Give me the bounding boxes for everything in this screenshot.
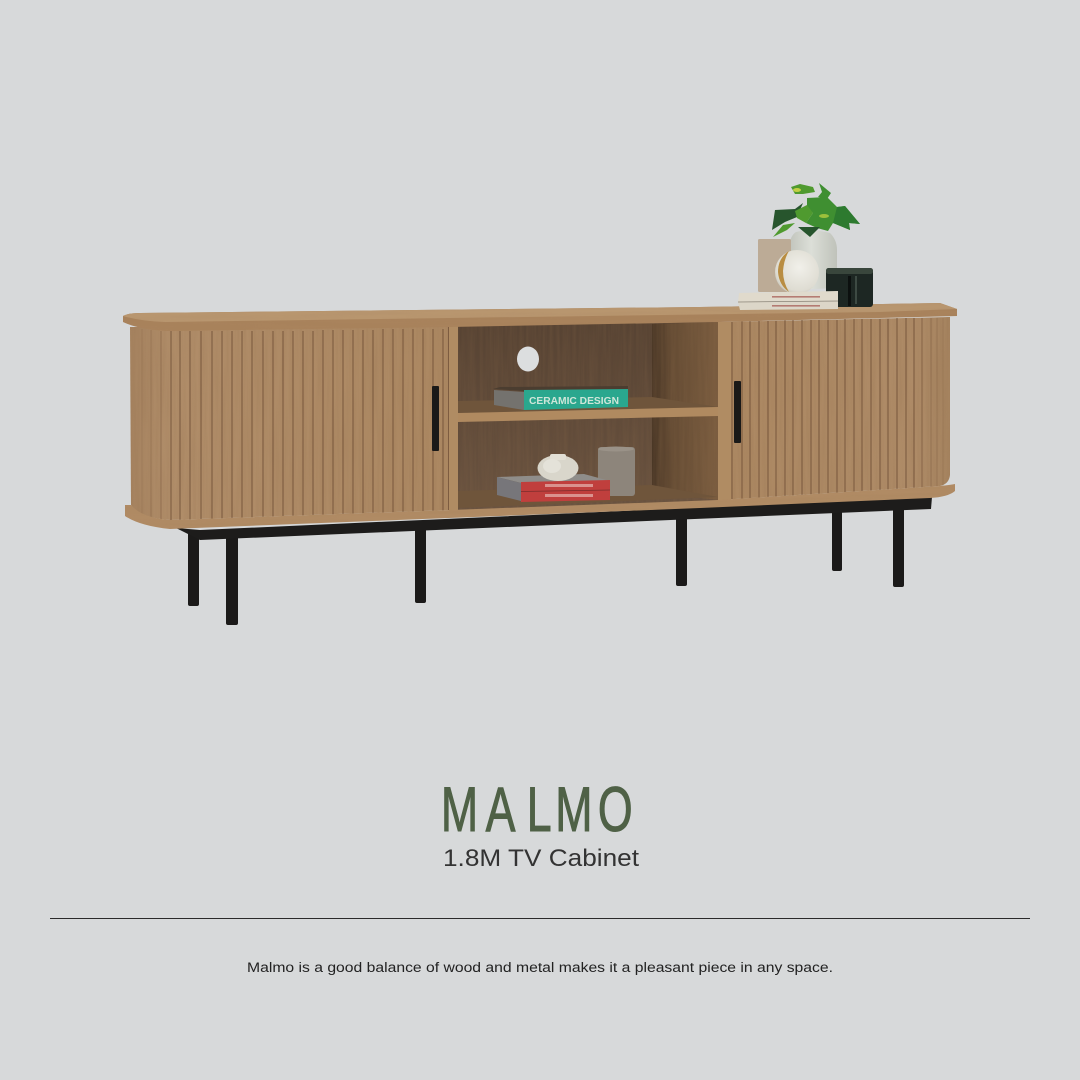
decor on cabinet bbox=[738, 183, 873, 310]
dark glass jar bbox=[826, 268, 873, 307]
right door handle bbox=[734, 381, 741, 443]
cylinder candle bbox=[598, 446, 635, 496]
subtitle: 1.8M TV Cabinet bbox=[443, 845, 639, 872]
left door handle bbox=[432, 386, 439, 451]
upper shelf bbox=[458, 397, 718, 413]
potted plant leaves bbox=[772, 183, 860, 237]
cabinet legs bbox=[188, 505, 904, 625]
centre compartment bbox=[452, 321, 720, 514]
small white vase bbox=[538, 454, 578, 481]
teal book: CERAMIC DESIGN bbox=[529, 395, 619, 407]
beige candle bbox=[758, 239, 791, 292]
stacked books bbox=[738, 291, 838, 310]
right centre stile bbox=[718, 322, 731, 501]
cable hole bbox=[517, 346, 539, 372]
left centre stile bbox=[448, 326, 458, 511]
white sphere bbox=[775, 250, 819, 294]
left sliding door bbox=[130, 327, 450, 520]
ceramic vase bbox=[790, 230, 837, 290]
top board bbox=[123, 303, 957, 331]
divider line bbox=[50, 918, 1030, 920]
teal book bbox=[493, 386, 628, 410]
right sliding door bbox=[718, 317, 950, 501]
description: Malmo is a good balance of wood and metal makes it a pleasant piece in any space. bbox=[247, 960, 833, 975]
lower shelf bbox=[458, 485, 718, 508]
red books bbox=[497, 474, 610, 502]
tv cabinet bbox=[123, 303, 957, 625]
title: MALMO: MALMO bbox=[441, 774, 633, 845]
bottom board bbox=[125, 484, 955, 529]
metal rail bbox=[176, 497, 932, 540]
